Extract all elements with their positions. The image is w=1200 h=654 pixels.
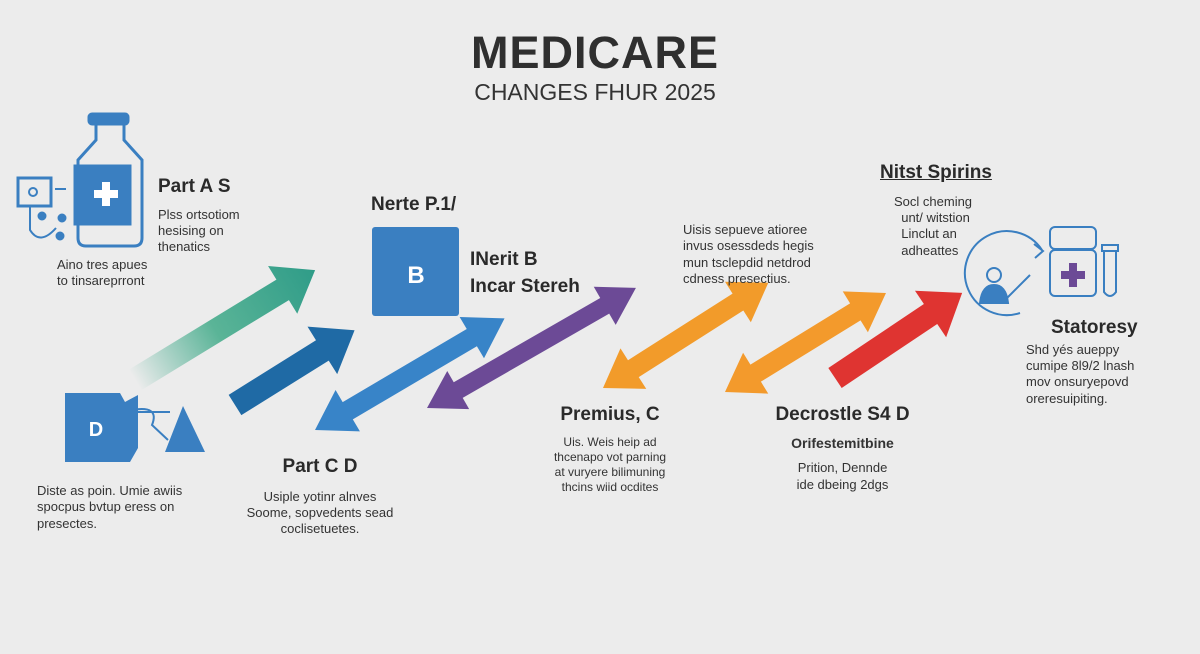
text block: Statoresy: oreresuipiting. xyxy=(1026,390,1108,406)
text block: Diste: presectes. xyxy=(37,516,97,530)
text block: Part A S: hesising on xyxy=(158,223,224,238)
text block: Part C D: Part C D xyxy=(283,456,357,477)
icon: doctor and kit xyxy=(965,227,1118,315)
heading: Nerte P.1/: Nerte P.1/ xyxy=(371,194,456,215)
text block: Decrostle S4 D: Orifestemitbine xyxy=(791,435,894,451)
text block: Decrostle S4 D: ide dbeing 2dgs xyxy=(797,476,888,492)
text block: Nitst Spirins: Linclut an xyxy=(901,226,957,241)
text block: Premius C: Premius, C xyxy=(560,404,660,425)
icon: B box: B xyxy=(407,262,425,289)
arrow: red xyxy=(819,270,978,401)
text block: Diste xyxy=(37,483,182,530)
text block: Part A S: thenatics xyxy=(158,239,210,254)
text block: Aino: Aino tres apues xyxy=(57,257,147,272)
icon: purple plus xyxy=(1061,263,1085,287)
text block: Uisis xyxy=(683,222,814,286)
text block: Part A S: Part A S xyxy=(158,176,231,197)
text block: Statoresy: Shd yés aueppy xyxy=(1026,342,1119,357)
icon: D box xyxy=(65,393,205,462)
heading: Inerit B xyxy=(470,249,580,297)
text block: Uisis: Uisis sepueve atioree xyxy=(683,222,807,237)
text block: Premius C: Uis. Weis heip ad xyxy=(563,435,657,449)
title: MEDICARE xyxy=(471,27,719,78)
text block: Diste: Diste as poin. Umie awiis xyxy=(37,483,182,498)
arrow: dark blue xyxy=(220,307,369,429)
text block: Part C D: Soome, sopvedents sead xyxy=(247,505,393,520)
text block: Aino xyxy=(57,257,147,288)
text block: Premius C: at vuryere bilimuning xyxy=(555,465,665,479)
text block: Statoresy: mov onsuryepovd xyxy=(1026,374,1129,389)
text block: Part C D: coclisetuetes. xyxy=(281,521,359,536)
arrow: teal xyxy=(120,246,330,404)
text block: Part C D: Usiple yotinr alnves xyxy=(264,489,376,504)
text block: Premius C: thcenapo vot parning xyxy=(554,450,666,464)
text block: Part A S: Plss ortsotiom xyxy=(158,207,240,222)
text block: Premius C: thcins wiid ocdites xyxy=(562,480,658,494)
text block: Premius C xyxy=(554,404,666,494)
icon: plus on bottle xyxy=(94,182,118,206)
text block: Uisis: mun tsclepdid netdrod xyxy=(683,254,811,270)
text block: Nitst Spirins: Socl cheming xyxy=(894,194,972,209)
text block: Statoresy: cumipe 8l9/2 lnash xyxy=(1026,358,1134,373)
text block: Part A S xyxy=(158,176,240,254)
text block: Aino: to tinsareprront xyxy=(57,273,144,288)
heading: Inerit B: INerit B xyxy=(470,249,538,270)
text block: Decrostle S4 D: Decrostle S4 D xyxy=(775,404,910,425)
text block: Decrostle S4 D xyxy=(775,404,910,492)
text block: Statoresy xyxy=(1026,317,1138,406)
text block: Nitst Spirins xyxy=(880,162,992,258)
text block: Uisis: invus osessdeds hegis xyxy=(683,238,814,253)
text block: Part C D xyxy=(247,456,393,536)
text block: Uisis: cdness presectius. xyxy=(683,271,791,286)
arrow: orange double 2 xyxy=(712,273,899,412)
text block: Statoresy: Statoresy xyxy=(1051,317,1138,338)
arrow: blue double xyxy=(303,298,517,451)
icon: medicine bottle xyxy=(18,114,142,246)
heading: Inerit B: Incar Stereh xyxy=(470,276,580,297)
text block: Nitst Spirins: unt/ witstion xyxy=(901,210,970,225)
icon: D box: D xyxy=(89,419,103,441)
subtitle: CHANGES FHUR 2025 xyxy=(474,79,716,105)
text block: Nitst Spirins: Nitst Spirins xyxy=(880,162,992,183)
icon: B box xyxy=(372,227,459,316)
text block: Diste: spocpus bvtup eress on xyxy=(37,499,174,514)
text block: Nitst Spirins: adheattes xyxy=(901,242,958,258)
text block: Decrostle S4 D: Prition, Dennde xyxy=(798,460,887,475)
arrow: purple double xyxy=(416,269,647,427)
arrow: orange double 1 xyxy=(590,262,781,408)
